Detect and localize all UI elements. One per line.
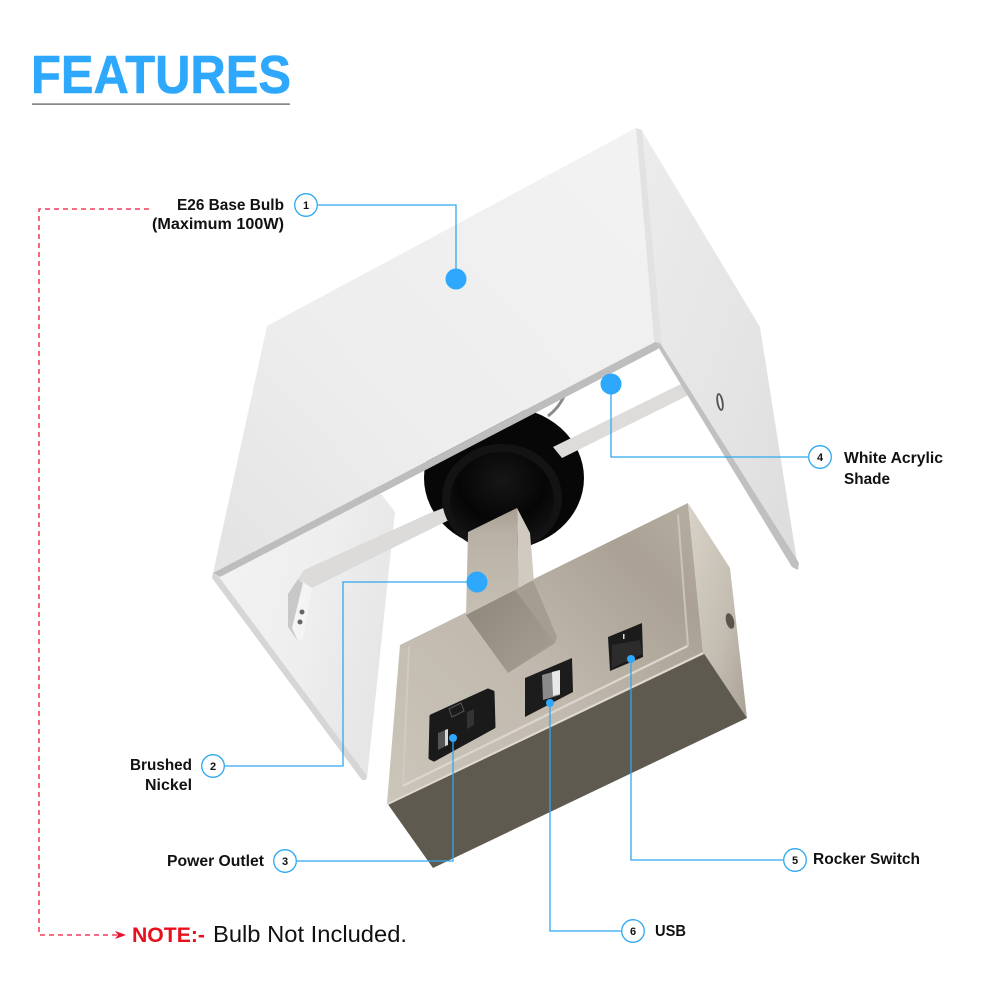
callout 3: power outlet: 3 xyxy=(282,856,288,868)
callout 4: white acrylic shade: Shade xyxy=(844,471,890,488)
callout 6: USB xyxy=(546,699,686,942)
left shade panel xyxy=(212,490,395,780)
callout 1: E26 base bulb: E26 Base Bulb xyxy=(177,197,284,214)
callout 2: brushed nickel: Brushed xyxy=(130,757,192,774)
socket dome xyxy=(442,444,562,552)
power outlet xyxy=(430,690,494,760)
callout 1: E26 base bulb: (Maximum 100W) xyxy=(152,216,284,233)
callout 1: E26 base bulb xyxy=(152,194,466,290)
bulb wire xyxy=(548,392,566,416)
note text: Bulb Not Included. xyxy=(213,921,407,947)
note text xyxy=(132,921,407,947)
callout 4: white acrylic shade xyxy=(600,374,943,488)
callout 2: brushed nickel: Nickel xyxy=(145,777,192,794)
callout 4: white acrylic shade: 4 xyxy=(817,452,824,464)
callout 4: white acrylic shade: White Acrylic xyxy=(844,450,943,467)
mounting bar and bracket xyxy=(288,381,693,641)
arrow: dashed note connector xyxy=(39,209,149,939)
nickel junction box xyxy=(387,503,747,868)
USB port xyxy=(525,658,573,717)
top shade panel xyxy=(213,128,660,577)
callout 6: USB: 6 xyxy=(630,926,636,938)
panel: lamp product drawing xyxy=(212,128,799,868)
callout 5: rocker switch: Rocker Switch xyxy=(813,851,920,868)
callout 3: power outlet xyxy=(167,734,457,872)
callout 2: brushed nickel: 2 xyxy=(210,761,216,773)
callout 3: power outlet: Power Outlet xyxy=(167,853,264,870)
black socket plate xyxy=(424,407,584,549)
nickel arm xyxy=(466,508,557,673)
callout 2: brushed nickel xyxy=(130,572,488,794)
right shade panel xyxy=(636,128,799,570)
callout 1: E26 base bulb: 1 xyxy=(303,200,309,212)
rocker switch xyxy=(608,623,643,671)
callout 5: rocker switch: 5 xyxy=(792,855,798,867)
title: FEATURES xyxy=(31,45,291,105)
callout 5: rocker switch xyxy=(627,655,920,871)
callout 6: USB: USB xyxy=(655,923,686,940)
note text: NOTE:- xyxy=(132,924,205,947)
